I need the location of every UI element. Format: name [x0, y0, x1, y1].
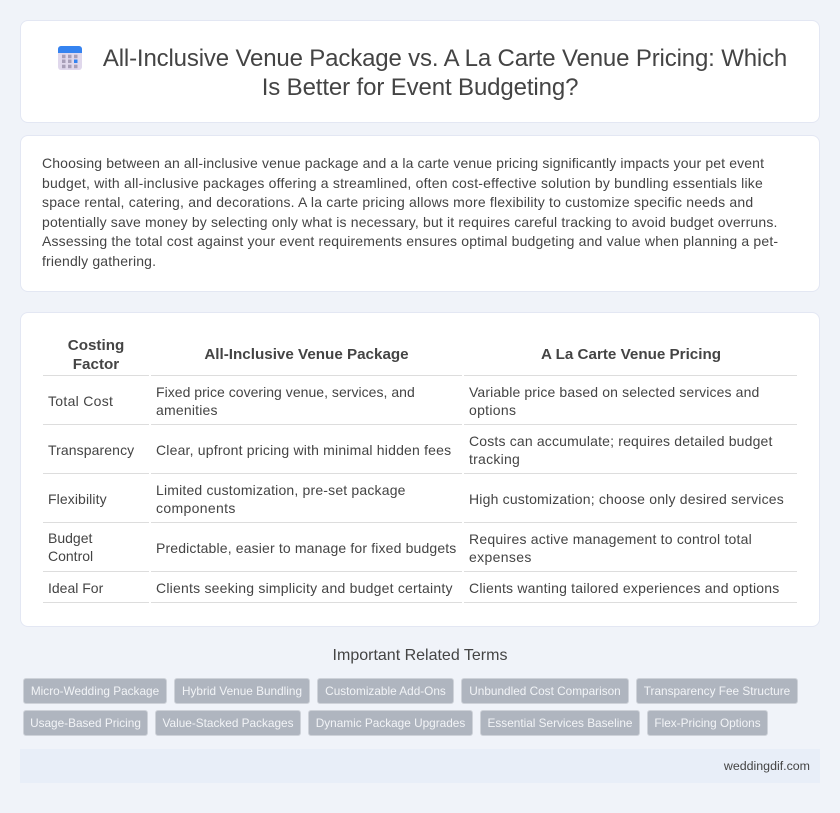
- intro paragraph: Choosing between an all-inclusive venue package and a la carte venue pricing significantly impacts your pet event: [42, 155, 764, 171]
- related term tags: Transparency Fee Structure: [644, 684, 790, 698]
- row: ideal for: [48, 580, 780, 596]
- row: ideal for: Clients wanting tailored experiences and options: [469, 580, 780, 596]
- row: flexibility: [48, 482, 784, 516]
- intro paragraph: Assessing the total cost against your event requirements ensures optimal budgeting and value when planning a pet-: [42, 233, 778, 249]
- row: total cost: Fixed price covering venue, services, and: [156, 384, 415, 400]
- related term tags: Hybrid Venue Bundling: [182, 684, 302, 698]
- row: transparency: Costs can accumulate; requires detailed budget: [469, 433, 773, 449]
- related term tags: Value-Stacked Packages: [163, 716, 293, 730]
- row: ideal for: Clients seeking simplicity and budget certainty: [156, 580, 453, 596]
- row: transparency: tracking: [469, 451, 520, 467]
- row: flexibility: High customization; choose only desired services: [469, 491, 784, 507]
- row: ideal for: Ideal For: [48, 580, 103, 596]
- row: transparency: Clear, upfront pricing with minimal hidden fees: [156, 442, 451, 458]
- table header: Factor: [73, 356, 119, 373]
- table header: [68, 337, 721, 373]
- related term tags: Customizable Add-Ons: [325, 684, 446, 698]
- header card: [20, 20, 820, 123]
- related term tags: Usage-Based Pricing: [30, 716, 141, 730]
- row: budget control: [48, 530, 752, 565]
- heading: important related terms: Important Related Terms: [333, 647, 507, 664]
- row: transparency: Transparency: [48, 442, 134, 458]
- intro paragraph: space rental, catering, and decorations. A la carte pricing allows more flexibility to customize specific needs and: [42, 194, 753, 210]
- table header: All-Inclusive Venue Package: [204, 346, 409, 363]
- title: Is Better for Event Budgeting?: [262, 74, 578, 101]
- row: flexibility: Flexibility: [48, 491, 107, 507]
- related term tags: Unbundled Cost Comparison: [469, 684, 621, 698]
- table header: A La Carte Venue Pricing: [541, 346, 721, 363]
- related term tags: Flex-Pricing Options: [654, 716, 761, 730]
- row: budget control: Budget: [48, 530, 92, 546]
- row: total cost: options: [469, 402, 516, 418]
- related term tags: Micro-Wedding Package: [31, 684, 159, 698]
- related term tags: [23, 678, 798, 736]
- related term tags: Essential Services Baseline: [488, 716, 632, 730]
- panel: comparison table: [20, 312, 820, 627]
- intro paragraph: potentially save money by selecting only what is necessary, but it requires careful tracking to avoid budget overruns.: [42, 214, 778, 230]
- table header: Costing: [68, 337, 124, 354]
- row: budget control: Control: [48, 548, 93, 564]
- intro paragraph: budget, with all-inclusive packages offering a streamlined, often cost-effective solution by bundling essentials like: [42, 175, 763, 191]
- comparison table: [43, 337, 797, 603]
- title: All-Inclusive Venue Package vs. A La Carte Venue Pricing: Which: [103, 45, 787, 72]
- row: total cost: Variable price based on selected services and: [469, 384, 759, 400]
- row: total cost: [48, 384, 759, 418]
- source: weddingdif.com: weddingdif.com: [724, 759, 810, 773]
- intro paragraph: [42, 155, 778, 269]
- row: flexibility: components: [156, 500, 236, 516]
- title: [103, 45, 787, 101]
- row: budget control: Predictable, easier to manage for fixed budgets: [156, 540, 456, 556]
- row: budget control: Requires active management to control total: [469, 531, 752, 547]
- row: flexibility: Limited customization, pre-set package: [156, 482, 406, 498]
- intro paragraph: friendly gathering.: [42, 253, 156, 269]
- related term tags: Dynamic Package Upgrades: [316, 716, 465, 730]
- row: total cost: Total Cost: [48, 393, 113, 409]
- icon: calendar: [58, 46, 82, 70]
- row: budget control: expenses: [469, 549, 532, 565]
- row: total cost: amenities: [156, 402, 218, 418]
- row: transparency: [48, 433, 773, 467]
- panel: intro text: [20, 135, 820, 292]
- footer bar: [20, 749, 820, 783]
